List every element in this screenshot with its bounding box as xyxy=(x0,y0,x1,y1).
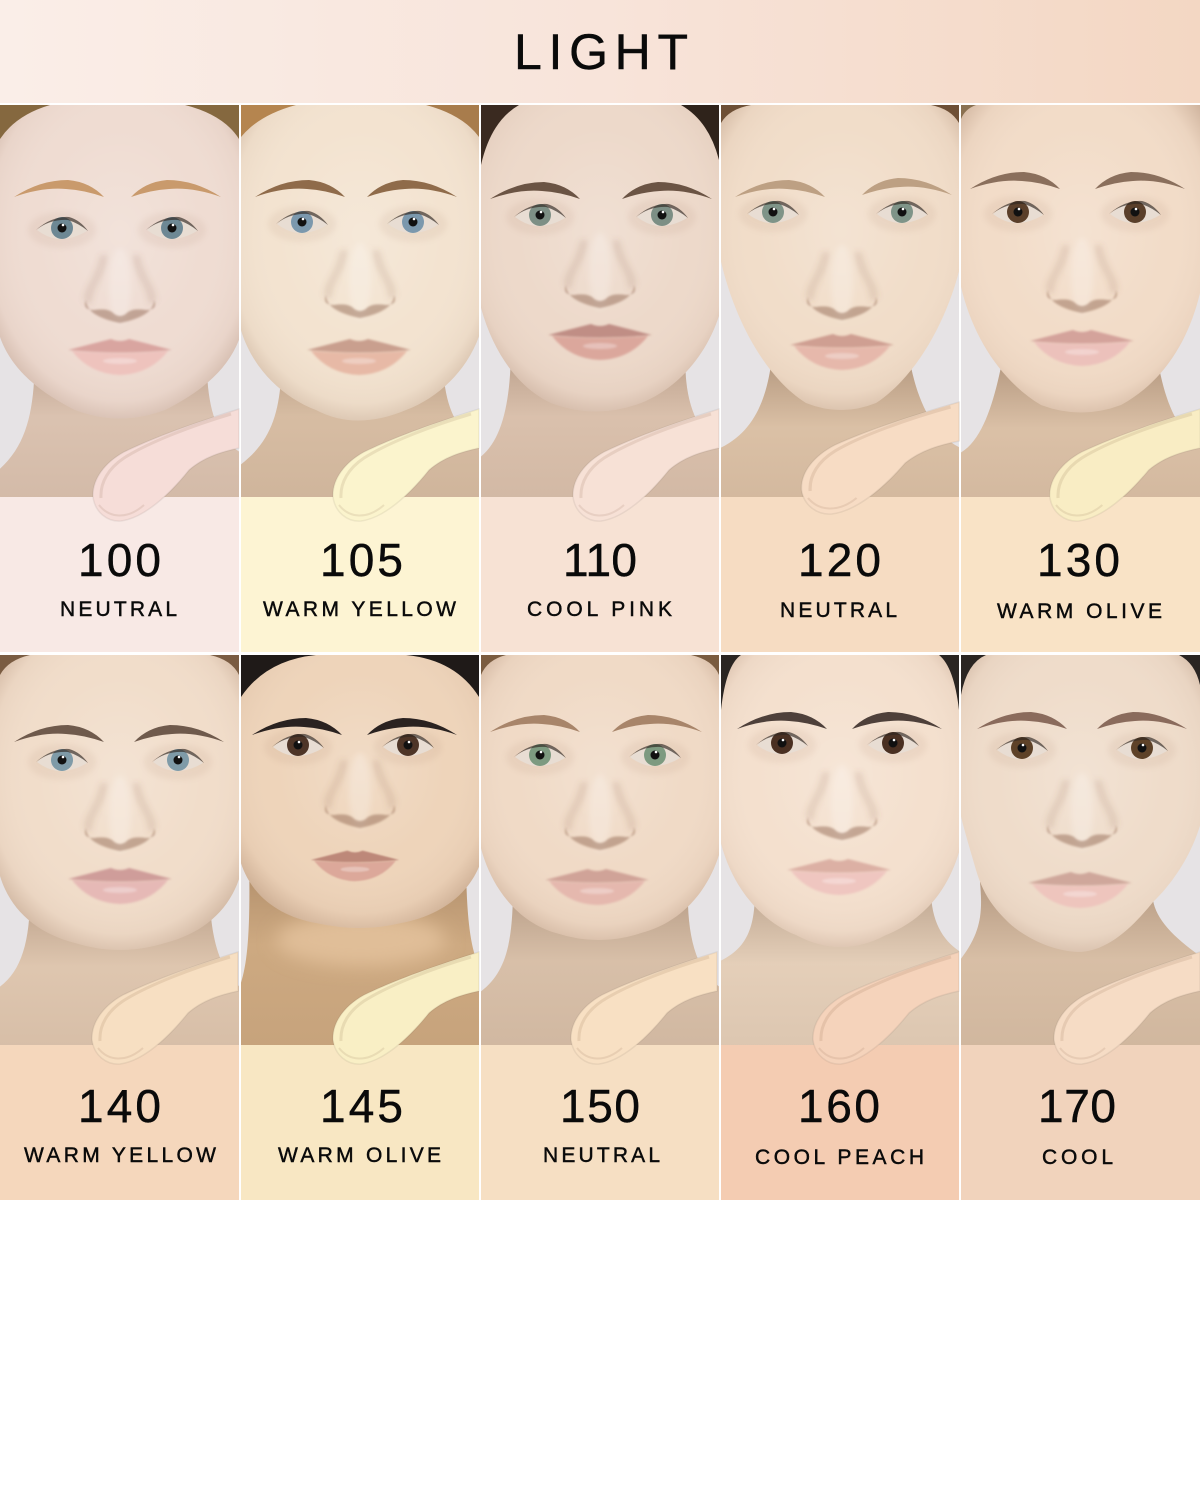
label block 170 xyxy=(961,1045,1200,1200)
name 170: COOL xyxy=(1042,1146,1113,1169)
number 130: 130 xyxy=(1037,534,1120,586)
label block 105 xyxy=(241,497,479,652)
swatch 145 xyxy=(333,952,479,1064)
number 150: 150 xyxy=(560,1080,640,1132)
portrait 140 xyxy=(0,655,239,1045)
name 105: WARM YELLOW xyxy=(263,598,456,621)
label block 130 xyxy=(961,497,1200,652)
swatch 150 xyxy=(571,952,717,1064)
swatch 120 xyxy=(801,402,959,514)
label block 160 xyxy=(721,1045,959,1200)
panel: shade 160 xyxy=(716,650,966,1200)
swatch 110 xyxy=(573,409,719,521)
number 160: 160 xyxy=(798,1080,880,1132)
name 160: COOL PEACH xyxy=(755,1146,924,1169)
name 150: NEUTRAL xyxy=(543,1144,660,1167)
label block 120 xyxy=(721,497,959,652)
panel: shade 140 xyxy=(0,650,245,1200)
portrait 105 xyxy=(241,105,479,497)
name 130: WARM OLIVE xyxy=(997,600,1162,623)
panel: shade 170 xyxy=(956,650,1200,1200)
portrait 120 xyxy=(721,105,959,497)
heading: LIGHT xyxy=(514,24,688,80)
panel: shade 150 xyxy=(476,650,726,1200)
portrait 150 xyxy=(481,655,719,1045)
number 120: 120 xyxy=(798,534,881,586)
swatch 160 xyxy=(813,952,959,1064)
name 110: COOL PINK xyxy=(527,598,672,621)
number 140: 140 xyxy=(78,1080,161,1132)
number 145: 145 xyxy=(320,1080,403,1132)
portrait 170 xyxy=(961,655,1200,1045)
name 145: WARM OLIVE xyxy=(278,1144,441,1167)
panel: shade 130 xyxy=(956,100,1200,652)
swatch 170 xyxy=(1054,952,1200,1064)
number 100: 100 xyxy=(78,534,161,586)
swatch 130 xyxy=(1050,409,1200,521)
panel: shade 105 xyxy=(236,100,486,652)
label block 110 xyxy=(481,497,719,652)
portrait 145 xyxy=(241,655,479,1045)
number 170: 170 xyxy=(1038,1080,1116,1132)
panel: shade 100 xyxy=(0,100,245,652)
label block 140 xyxy=(0,1045,239,1200)
panel: shade 110 xyxy=(476,100,726,652)
swatch 100 xyxy=(93,409,239,521)
name 120: NEUTRAL xyxy=(780,599,897,622)
portrait 110 xyxy=(481,105,719,497)
name 100: NEUTRAL xyxy=(60,598,177,621)
portrait 100 xyxy=(0,105,239,497)
panel: shade 145 xyxy=(236,650,486,1200)
portrait 130 xyxy=(961,105,1200,497)
number 105: 105 xyxy=(320,534,403,586)
swatch 105 xyxy=(333,409,479,521)
panel: shade 120 xyxy=(716,100,966,652)
header band: LIGHT xyxy=(0,0,1200,103)
label block 150 xyxy=(481,1045,719,1200)
portrait 160 xyxy=(721,655,959,1045)
label block 145 xyxy=(241,1045,479,1200)
number 110: 110 xyxy=(563,534,637,586)
name 140: WARM YELLOW xyxy=(24,1144,216,1167)
label block 100 xyxy=(0,497,239,652)
swatch 140 xyxy=(92,952,238,1064)
